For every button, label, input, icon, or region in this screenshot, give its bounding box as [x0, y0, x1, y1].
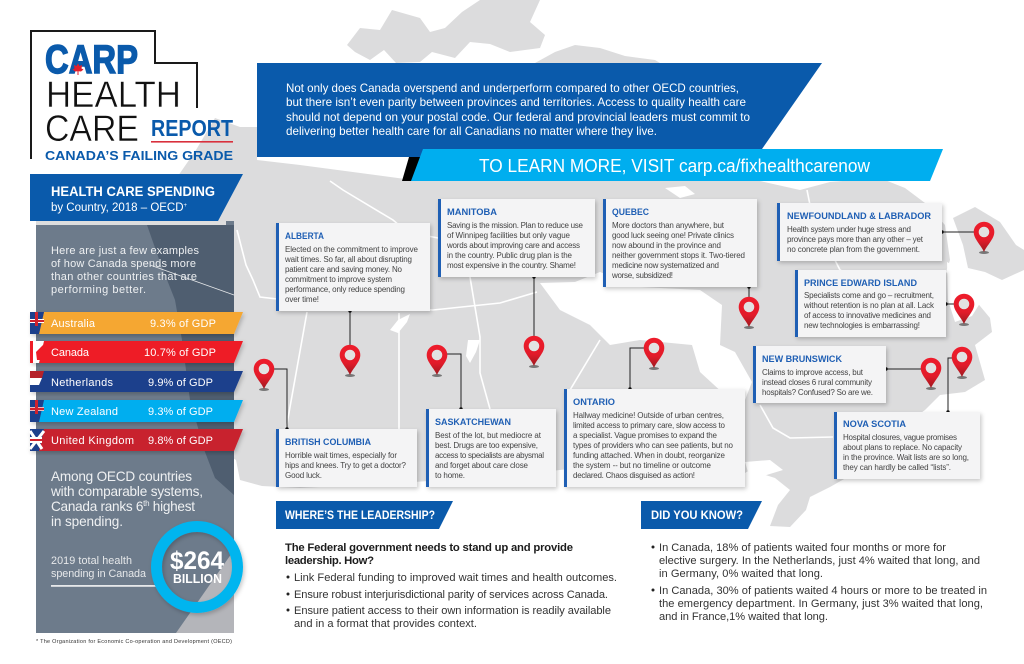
icon: maple leaf: [72, 64, 84, 75]
text: total spending label: [51, 555, 161, 587]
text: OECD ranking: in spending.: [51, 514, 123, 529]
body text: no concrete plan from the government.: [787, 245, 920, 254]
bullet list: In Canada, 18% of patients waited four months or more for: [659, 542, 946, 554]
body text: [435, 431, 544, 480]
body text: of Winnipeg facilities but only vague: [447, 231, 571, 240]
body text: Saving is the mission. Plan to reduce use: [447, 221, 584, 230]
bar: Netherlands: Netherlands: [51, 377, 114, 389]
text: total spending label: 2019 total health: [51, 555, 132, 567]
body text: limited access to primary care, slow access to: [573, 421, 726, 430]
text: OECD ranking: highest: [149, 499, 195, 514]
card: Quebec: QUEBEC: [612, 207, 649, 218]
connector: Nova Scotia: [946, 358, 953, 414]
card: Ontario: [564, 389, 745, 487]
body text: and forget about care close: [435, 461, 529, 470]
banner: health care spending: HEALTH CARE SPENDING: [51, 184, 215, 199]
body text: declared. Chaos disguised as action!: [573, 471, 695, 480]
icon: pin New Brunswick: [921, 358, 941, 390]
card: British Columbia: [276, 429, 417, 487]
bullet list: [652, 542, 987, 623]
bullet list: Ensure patient access to their own information is readily available: [294, 605, 611, 617]
body text: [803, 291, 935, 330]
body text: Hospital closures, vague promises: [843, 433, 957, 442]
bar: Canada: [30, 341, 243, 363]
icon: pin PEI: [954, 294, 974, 326]
intro panel: but there isn’t even parity between provinces and territories. Access to quality health care: [286, 95, 746, 109]
body text: hips and knees. Try to get a doctor?: [285, 461, 407, 470]
card: Newfoundland and Labrador: NEWFOUNDLAND & LABRADOR: [787, 211, 931, 222]
icon: pin Nova Scotia: [952, 347, 972, 379]
text: intro: than other countries that are: [51, 271, 197, 283]
intro panel: should not depend on your postal code. Our federal and provincial leaders must commit to: [286, 110, 750, 124]
body text: in the country. Public drug plan is the: [447, 251, 573, 260]
body text: [285, 451, 407, 480]
text: intro: performing better.: [51, 284, 146, 296]
body text: commitment to improve system: [285, 275, 392, 284]
panel: health care spending: [30, 174, 243, 633]
connector: Saskatchewan: [445, 354, 463, 411]
text: intro: [51, 245, 200, 296]
body text: province pays more than any other – yet: [787, 235, 924, 244]
bar: New Zealand: [30, 400, 243, 422]
section: did you know: [641, 501, 987, 623]
bullet list: In Canada, 30% of patients waited 4 hours or more to be treated in: [659, 585, 987, 597]
bar: United Kingdom: United Kingdom: [51, 435, 134, 447]
heading: WHERE’S THE LEADERSHIP?: [285, 510, 435, 522]
body text: instead closes 6 rural community: [762, 378, 872, 387]
body text: neither government stops it. Two-tiered: [612, 251, 745, 260]
banner: health care spending: by Country, 2018 – OECD: [51, 202, 184, 214]
body text: performance, only reduce spending: [285, 285, 405, 294]
body text: Hallway medicine! Outside of urban centres,: [573, 411, 724, 420]
icon: pin Ontario: [644, 338, 664, 370]
body text: new technologies is embarrassing!: [804, 321, 920, 330]
text: OECD ranking: Canada ranks 6: [51, 499, 143, 514]
bar: Netherlands: [30, 371, 243, 392]
bullet list: Link Federal funding to improved wait times and health outcomes.: [294, 572, 617, 584]
text: OECD ranking: Among OECD countries: [51, 469, 192, 484]
body text: types of providers who can see patients, but no: [573, 441, 734, 450]
lead text: leadership. How?: [285, 555, 374, 567]
intro panel: delivering better health care for all Canadians no matter where they live.: [286, 124, 657, 138]
lead text: The Federal government needs to stand up and provide: [285, 542, 573, 554]
card: Saskatchewan: [426, 409, 556, 487]
text: intro: Here are just a few examples: [51, 245, 200, 257]
connector: Newfoundland: [940, 230, 975, 234]
logo: CARP Health Care Report: [45, 38, 233, 163]
body text: without retention is no plan at all. Lack: [803, 301, 935, 310]
banner: health care spending: [30, 174, 243, 221]
icon: pin Quebec: [739, 297, 759, 329]
bar: United Kingdom: [30, 429, 243, 451]
connector: New Brunswick: [884, 367, 922, 371]
logo: CARP Health Care Report: CANADA’S FAILING GRADE: [45, 148, 233, 163]
card: Prince Edward Island: [795, 270, 946, 337]
icon: pin British Columbia: [254, 359, 274, 391]
callout: $264 billion: $264: [170, 547, 224, 575]
logo frame: [31, 31, 197, 159]
bullet list: Ensure robust interjurisdictional parity of services across Canada.: [294, 589, 608, 601]
banner: health care spending: +: [183, 203, 187, 209]
lead text: [285, 542, 573, 567]
bar: United Kingdom: 9.8% of GDP: [148, 435, 213, 447]
footnote: * The Organization for Economic Co-operation and Development (OECD): [36, 639, 232, 645]
bar: Canada: Canada: [51, 347, 90, 359]
text: OECD ranking: [50, 469, 203, 529]
body text: Health system under huge stress and: [787, 225, 911, 234]
logo: CARP Health Care Report: REPORT: [151, 115, 233, 141]
body text: [762, 368, 873, 397]
bar: Australia: Australia: [51, 318, 96, 330]
body text: they can hardly be called “lists”.: [843, 463, 951, 472]
connector: Alberta: [348, 309, 352, 345]
connector: Quebec: [747, 285, 751, 298]
body text: [611, 221, 745, 280]
connector: British Columbia: [272, 369, 289, 431]
bullet list: and in France,1% waited that long.: [659, 611, 828, 623]
body text: [843, 433, 969, 472]
card: New Brunswick: NEW BRUNSWICK: [762, 354, 842, 365]
body text: the system -- but no timeline or outcome: [573, 461, 712, 470]
text: total spending label: spending in Canada: [51, 568, 146, 580]
card: Saskatchewan: SASKATCHEWAN: [435, 417, 511, 428]
card: Nova Scotia: [834, 412, 980, 479]
card: Quebec: [603, 199, 757, 287]
body text: over time!: [285, 295, 319, 304]
body text: hospitals? Confused? So are we.: [762, 388, 873, 397]
body text: now abound in the province and: [612, 241, 721, 250]
body text: Best of the lot, but mediocre at: [435, 431, 542, 440]
text: OECD ranking: with comparable systems,: [50, 484, 203, 499]
callout: $264 billion: BILLION: [173, 572, 222, 586]
call to action banner: TO LEARN MORE, VISIT carp.ca/fixhealthcarenow: [479, 156, 871, 176]
body text: Elected on the commitment to improve: [285, 245, 419, 254]
card: Manitoba: [438, 199, 595, 277]
bullet list: in Germany, 0% waited that long.: [659, 568, 823, 580]
heading: DID YOU KNOW?: [651, 510, 743, 522]
body text: Good luck.: [285, 471, 322, 480]
bar: Australia: 9.3% of GDP: [150, 318, 216, 330]
card: Prince Edward Island: PRINCE EDWARD ISLAND: [804, 278, 917, 289]
bar: Australia: [30, 312, 243, 334]
body text: worse, subsidized!: [611, 271, 673, 280]
body text: [284, 245, 419, 304]
body text: funding attached. When in doubt, reorganize: [573, 451, 726, 460]
card: Ontario: ONTARIO: [573, 397, 616, 408]
body text: good luck seeing one! Private clinics: [612, 231, 734, 240]
connector: Manitoba: [532, 275, 536, 336]
connector: Ontario: [628, 348, 645, 391]
heading: [641, 501, 762, 529]
intro panel: Not only does Canada overspend and underperform compared to other OECD countries,: [286, 81, 739, 95]
heading: [276, 501, 453, 529]
body text: medicine now systematized and: [612, 261, 719, 270]
body text: a specialist. Vague promises to expand the: [573, 431, 718, 440]
card: Newfoundland and Labrador: [777, 203, 942, 261]
card: British Columbia: BRITISH COLUMBIA: [285, 437, 371, 448]
logo: CARP Health Care Report: CARE: [45, 107, 139, 149]
body text: [446, 221, 584, 270]
background map of Canada: [140, 0, 1024, 527]
call to action banner: [402, 149, 943, 181]
bullet list: the emergency department. In Germany, just 3% waited that long,: [659, 598, 983, 610]
body text: Specialists come and go – recruitment,: [804, 291, 934, 300]
bullet list: [286, 572, 617, 630]
logo: CARP Health Care Report: HEALTH: [46, 73, 181, 115]
body text: Claims to improve access, but: [762, 368, 864, 377]
body text: wait times. So far, all about disrupting: [284, 255, 412, 264]
callout: $264 billion: [156, 526, 238, 608]
text: intro: of how Canada spends more: [51, 258, 196, 270]
body text: in the province. Wait lists are so long,: [843, 453, 969, 462]
icon: pin Saskatchewan: [427, 345, 447, 377]
body text: access to specialists are abysmal: [435, 451, 544, 460]
body text: of access to innovative medicines and: [804, 311, 931, 320]
bar: New Zealand: 9.3% of GDP: [148, 406, 213, 418]
card: Nova Scotia: NOVA SCOTIA: [843, 419, 906, 430]
body text: words about improving care and access: [446, 241, 580, 250]
icon: pin Newfoundland: [974, 222, 994, 254]
section: where's the leadership: [276, 501, 617, 630]
card: New Brunswick: [753, 346, 886, 403]
connector: PEI: [944, 302, 955, 306]
bar: Netherlands: 9.9% of GDP: [148, 377, 213, 389]
icon: pin Manitoba: [524, 336, 544, 368]
body text: [573, 411, 734, 480]
card: Manitoba: MANITOBA: [447, 207, 497, 218]
body text: Horrible wait times, especially for: [285, 451, 397, 460]
bar: Canada: 10.7% of GDP: [144, 347, 216, 359]
body text: More doctors than anywhere, but: [612, 221, 725, 230]
icon: pin Alberta: [340, 345, 360, 377]
bullet list: and in a format that provides context.: [294, 618, 477, 630]
body text: most expensive in the country. Shame!: [447, 261, 576, 270]
logo: CARP Health Care Report: CARP: [45, 38, 138, 82]
text: OECD ranking: th: [143, 499, 150, 508]
body text: about plans to replace. No capacity: [843, 443, 962, 452]
intro panel: [257, 63, 822, 157]
bar: New Zealand: New Zealand: [51, 406, 118, 418]
bullet list: elective surgery. In the Netherlands, just 4% waited that long, and: [659, 555, 980, 567]
body text: [787, 225, 924, 254]
body text: to home.: [435, 471, 465, 480]
card: Alberta: ALBERTA: [285, 231, 324, 242]
card: Alberta: [276, 223, 430, 311]
body text: patient care and saving money. No: [285, 265, 403, 274]
body text: best. Drugs are too expensive,: [435, 441, 538, 450]
